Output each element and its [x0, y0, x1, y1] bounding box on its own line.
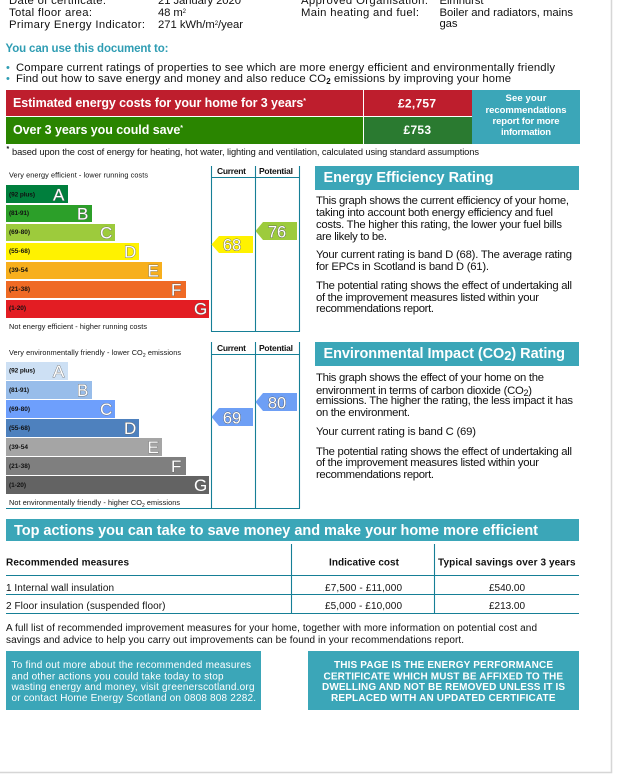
- chart: energy efficiency rating: Very energy efficient - lower running costs: [9, 170, 148, 180]
- band C: C: [100, 400, 112, 419]
- chart: environmental impact rating: Potential: [259, 343, 293, 353]
- callout: find out more: [6, 651, 261, 710]
- property details: 2: [183, 9, 187, 15]
- chart: environmental impact rating: emissions: [145, 498, 180, 507]
- chart: energy efficiency rating: Not energy efficient - higher running costs: [9, 322, 147, 331]
- panel: environmental impact text: environment in terms of carbon dioxide (CO: [316, 385, 524, 397]
- panel: environmental impact text: The potential rating shows the effect of undertaking all: [316, 446, 572, 458]
- band F: (21-38): [9, 286, 30, 293]
- chart: environmental impact rating: [6, 342, 300, 509]
- band E: E: [148, 262, 159, 280]
- band A: [6, 185, 68, 204]
- panel: estimated costs and savings: [6, 90, 580, 144]
- panel: estimated costs and savings: recommendations: [486, 105, 566, 116]
- callout: certificate notice: REPLACED WITH AN UPDATED CERTIFICATE: [331, 693, 556, 704]
- property details: 2: [215, 21, 219, 27]
- panel: environmental impact text: recommendations report.: [316, 469, 434, 481]
- panel: energy efficiency text: This graph shows the current efficiency of your home,: [316, 195, 569, 207]
- panel: environmental impact text: Your current rating is band C (69): [316, 426, 476, 438]
- band A: A: [53, 186, 65, 204]
- band C: (69-80): [9, 406, 30, 413]
- band A: (92 plus): [9, 368, 35, 374]
- property details: Total floor area:: [9, 7, 92, 19]
- band B: (81-91): [9, 210, 29, 217]
- panel: environmental impact text: This graph shows the effect of your home on the: [316, 372, 544, 384]
- panel: environmental impact text: [315, 342, 579, 481]
- bullet list: Compare current ratings of properties to see which are more energy efficient and environmentally friendly: [16, 62, 555, 74]
- heading: environmental impact rating: [315, 342, 579, 366]
- band E: [6, 438, 162, 457]
- band B: (81-91): [9, 387, 29, 394]
- table: recommended measures: £540.00: [489, 583, 525, 594]
- footnote: based upon the cost of energy for heating, hot water, lighting and ventilation, calculated using standard assumptions: [12, 147, 479, 157]
- band C: C: [100, 224, 112, 242]
- callout: find out more: or contact Home Energy Scotland on 0808 808 2282.: [12, 693, 256, 704]
- band A: [6, 362, 68, 381]
- arrow: potential 76: [256, 222, 297, 242]
- panel: estimated costs and savings: Over 3 years you could save: [13, 123, 180, 137]
- text: full list note: savings and advice to help you carry out improvements can be found in your recommendations report.: [6, 635, 464, 646]
- panel: estimated costs and savings: £753: [404, 123, 431, 137]
- band G: G: [194, 476, 207, 495]
- callout: certificate notice: CERTIFICATE WHICH MUST BE AFFIXED TO THE: [324, 672, 563, 682]
- heading: environmental impact rating: ) Rating: [511, 346, 565, 362]
- heading: top actions: [6, 519, 579, 541]
- property details: Boiler and radiators, mains: [440, 7, 573, 19]
- band G: [6, 300, 209, 318]
- band B: B: [77, 381, 88, 400]
- arrow: current 68: [212, 236, 253, 254]
- property details: /year: [218, 19, 243, 31]
- panel: estimated costs and savings: report for more: [492, 116, 560, 127]
- table: recommended measures: Typical savings over 3 years: [438, 558, 576, 568]
- property details: Main heating and fuel:: [301, 7, 419, 19]
- band D: [6, 242, 139, 262]
- callout: certificate notice: [308, 651, 579, 710]
- band C: (69-80): [9, 229, 30, 236]
- table: recommended measures: £213.00: [489, 601, 525, 612]
- property details: 271 kWh/m: [158, 19, 215, 31]
- panel: estimated costs and savings: See your: [506, 93, 547, 104]
- panel: energy efficiency text: taking into account both energy efficiency and fuel: [316, 207, 553, 219]
- panel: environmental impact text: on the environment.: [316, 407, 410, 419]
- band D: D: [124, 419, 136, 438]
- band E: [6, 262, 162, 280]
- arrow: current 69: 69: [223, 410, 241, 428]
- heading: energy efficiency rating: [315, 166, 579, 190]
- panel: energy efficiency text: costs. The higher this rating, the lower your fuel bills: [316, 219, 562, 231]
- chart: environmental impact rating: 2: [142, 503, 145, 509]
- band G: (1-20): [9, 305, 26, 312]
- band B: B: [77, 204, 88, 224]
- band E: (39-54: [9, 267, 28, 274]
- bullet list: Find out how to save energy and money and also reduce CO: [16, 73, 326, 85]
- band F: F: [171, 280, 181, 300]
- table: recommended measures: 1 Internal wall insulation: [6, 583, 114, 594]
- callout: find out more: To find out more about the recommended measures: [12, 660, 251, 671]
- band F: F: [171, 457, 181, 476]
- chart: environmental impact rating: Not environmentally friendly - higher CO: [9, 498, 142, 507]
- callout: find out more: wasting energy and money, visit greenerscotland.org: [10, 682, 254, 693]
- table: recommended measures: £7,500 - £11,000: [325, 583, 402, 594]
- property details: gas: [440, 18, 458, 30]
- band F: (21-38): [9, 463, 30, 470]
- arrow: potential 76: 76: [268, 224, 286, 242]
- panel: energy efficiency text: are likely to be.: [316, 231, 387, 243]
- panel: estimated costs and savings: information: [501, 127, 551, 138]
- heading: energy efficiency rating: Energy Efficiency Rating: [324, 170, 494, 186]
- bullet list: •: [6, 73, 10, 85]
- band B: [6, 381, 92, 400]
- chart: energy efficiency rating: Current: [217, 166, 246, 176]
- panel: energy efficiency text: The potential rating shows the effect of undertaking all: [316, 280, 572, 292]
- bullet list: •: [6, 62, 10, 74]
- arrow: current 69: [212, 408, 253, 428]
- panel: estimated costs and savings: *: [180, 125, 183, 132]
- panel: environmental impact text: ): [528, 385, 532, 397]
- arrow: potential 80: [256, 393, 297, 412]
- band F: [6, 280, 186, 300]
- chart: environmental impact rating: 2: [143, 353, 146, 359]
- band D: [6, 419, 139, 438]
- band G: G: [194, 300, 207, 318]
- panel: energy efficiency text: for EPCs in Scotland is band D (61).: [316, 261, 489, 273]
- bullet list: [6, 62, 555, 86]
- chart: environmental impact rating: emissions: [146, 348, 181, 357]
- table: recommended measures: 2 Floor insulation (suspended floor): [6, 601, 166, 612]
- text: full list note: [6, 623, 537, 646]
- band B: [6, 204, 92, 224]
- band G: [6, 476, 209, 495]
- band D: (55-68): [9, 425, 30, 432]
- table: recommended measures: [6, 544, 579, 614]
- text: full list note: A full list of recommended improvement measures for your home, together with more information on potential cost and: [6, 623, 537, 634]
- chart: environmental impact rating: Very environmentally friendly - lower CO: [9, 348, 143, 357]
- bullet list: emissions by improving your home: [331, 73, 511, 85]
- chart: environmental impact rating: Current: [217, 343, 246, 353]
- callout: certificate notice: DWELLING AND NOT BE REMOVED UNLESS IT IS: [322, 682, 565, 693]
- band A: A: [53, 362, 65, 381]
- footnote: *: [6, 146, 10, 153]
- property details: Primary Energy Indicator:: [9, 19, 145, 31]
- panel: estimated costs and savings: £2,757: [398, 96, 436, 110]
- chart: energy efficiency rating: Potential: [259, 166, 293, 176]
- band E: E: [148, 438, 159, 457]
- heading: top actions: Top actions you can take to save money and make your home more efficient: [14, 523, 538, 539]
- chart: energy efficiency rating: [6, 166, 300, 332]
- heading: environmental impact rating: Environmental Impact (CO: [324, 346, 504, 362]
- panel: energy efficiency text: of the improvement measures listed within your: [316, 292, 539, 304]
- panel: estimated costs and savings: Estimated energy costs for your home for 3 years: [13, 96, 303, 110]
- arrow: current 68: 68: [223, 236, 241, 254]
- band F: [6, 457, 186, 476]
- heading: you can use this document to: You can use this document to:: [6, 43, 168, 55]
- panel: estimated costs and savings: *: [303, 98, 306, 105]
- panel: energy efficiency text: [315, 166, 579, 315]
- property details: 48 m: [158, 7, 183, 19]
- table: recommended measures: £5,000 - £10,000: [325, 601, 402, 612]
- property details: [9, 0, 573, 31]
- table: recommended measures: Recommended measures: [6, 558, 129, 568]
- band C: [6, 224, 115, 242]
- arrow: potential 80: 80: [268, 394, 286, 412]
- callout: certificate notice: THIS PAGE IS THE ENERGY PERFORMANCE: [334, 660, 553, 671]
- panel: energy efficiency text: recommendations report.: [316, 303, 434, 315]
- band C: [6, 400, 115, 419]
- band E: (39-54: [9, 444, 28, 451]
- band A: (92 plus): [9, 192, 35, 198]
- panel: energy efficiency text: Your current rating is band D (68). The average rating: [316, 249, 572, 261]
- callout: find out more: and other actions you could take today to stop: [12, 672, 224, 682]
- heading: environmental impact rating: 2: [504, 348, 511, 363]
- band D: D: [124, 242, 136, 262]
- band G: (1-20): [9, 482, 26, 489]
- table: recommended measures: Indicative cost: [329, 558, 400, 568]
- panel: environmental impact text: emissions. The higher the rating, the less impact it has: [316, 395, 573, 407]
- band D: (55-68): [9, 248, 30, 255]
- panel: environmental impact text: 2: [523, 388, 529, 398]
- bullet list: 2: [326, 77, 331, 86]
- panel: environmental impact text: of the improvement measures listed within your: [316, 457, 539, 469]
